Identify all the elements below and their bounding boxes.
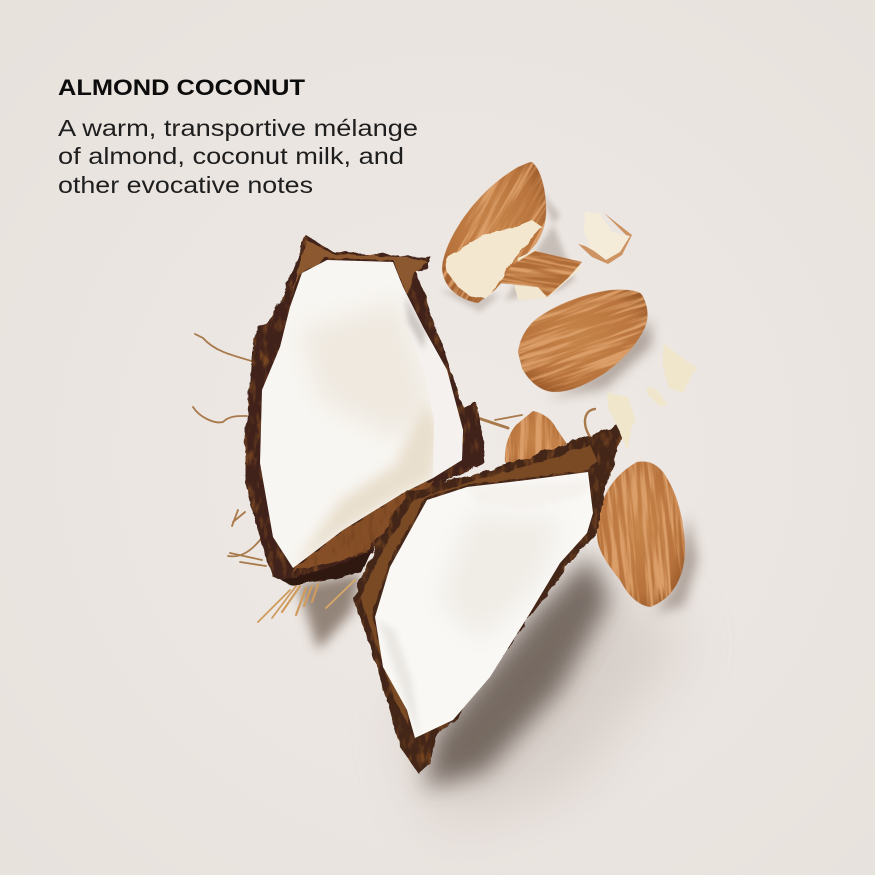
inner fibrous band <box>292 480 433 572</box>
dark lower band <box>282 550 372 585</box>
soft shadows <box>298 190 698 830</box>
almond: top broken half <box>381 117 607 348</box>
shell: lower right piece <box>352 422 627 773</box>
description text: other evocative notes <box>58 172 313 198</box>
shell: upper left piece <box>245 235 485 584</box>
coconut piece: upper left <box>240 235 485 585</box>
coconut fibres <box>193 334 595 622</box>
heading: ALMOND COCONUT <box>58 75 305 100</box>
description text <box>58 115 418 198</box>
top rim orange <box>290 240 428 300</box>
almond: sliced fragment <box>494 240 588 308</box>
small almond behind coconut <box>505 411 567 470</box>
rim orange <box>360 445 598 725</box>
description text: of almond, coconut milk, and <box>58 143 404 169</box>
almond: lower right <box>584 454 698 615</box>
flesh <box>260 260 463 568</box>
flesh <box>375 472 593 738</box>
white underside <box>514 250 582 300</box>
description text: A warm, transportive mélange <box>58 115 418 141</box>
illustration: coconut and almonds with heading <box>58 80 704 836</box>
almond: chip top right <box>578 212 632 264</box>
exposed kernel <box>445 220 542 298</box>
almond skin <box>381 117 607 348</box>
almond: large centre <box>487 250 679 432</box>
coconut piece: lower right <box>352 422 627 773</box>
almond chips: small white pieces <box>608 343 698 450</box>
